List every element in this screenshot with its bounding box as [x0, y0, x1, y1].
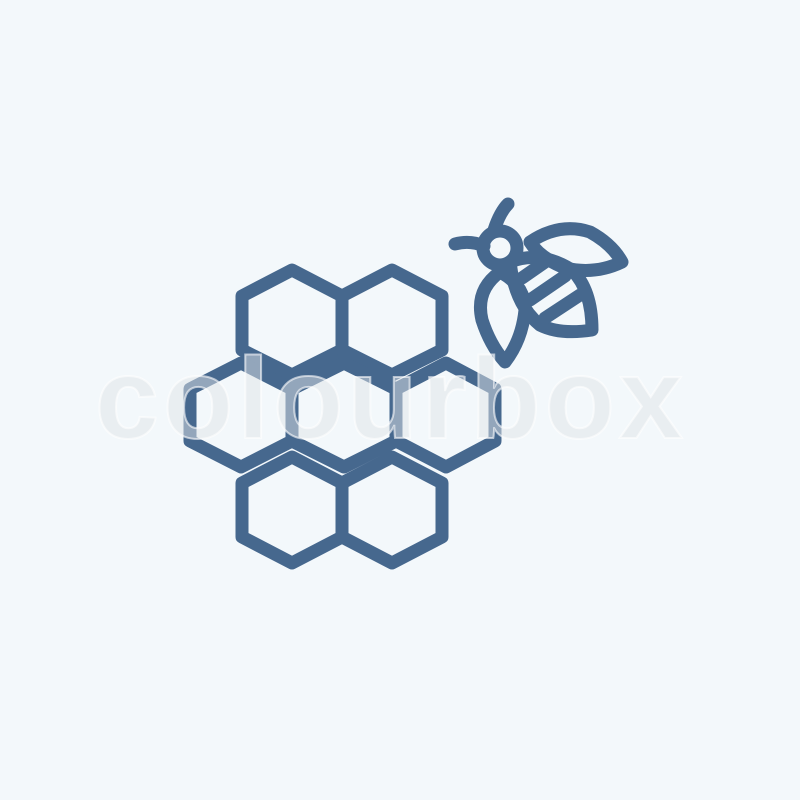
bee body — [510, 258, 592, 332]
hexagon: bottom left — [242, 457, 342, 563]
bee antennae — [494, 204, 508, 230]
bee upper wing — [530, 229, 622, 270]
bee head — [483, 231, 517, 265]
hexagon: top left — [242, 270, 342, 375]
hexagon: middle right — [396, 363, 495, 467]
hexagon: middle center — [292, 363, 396, 467]
bee stripes — [522, 262, 580, 318]
icon: bee — [455, 204, 622, 362]
hexagon: top right — [342, 270, 442, 375]
bee lower wing — [480, 272, 525, 362]
watermark text: colourbox — [95, 335, 687, 463]
hexagon: middle left — [190, 363, 292, 467]
icon: honeycomb — [190, 270, 495, 563]
hexagon: bottom right — [342, 457, 442, 563]
